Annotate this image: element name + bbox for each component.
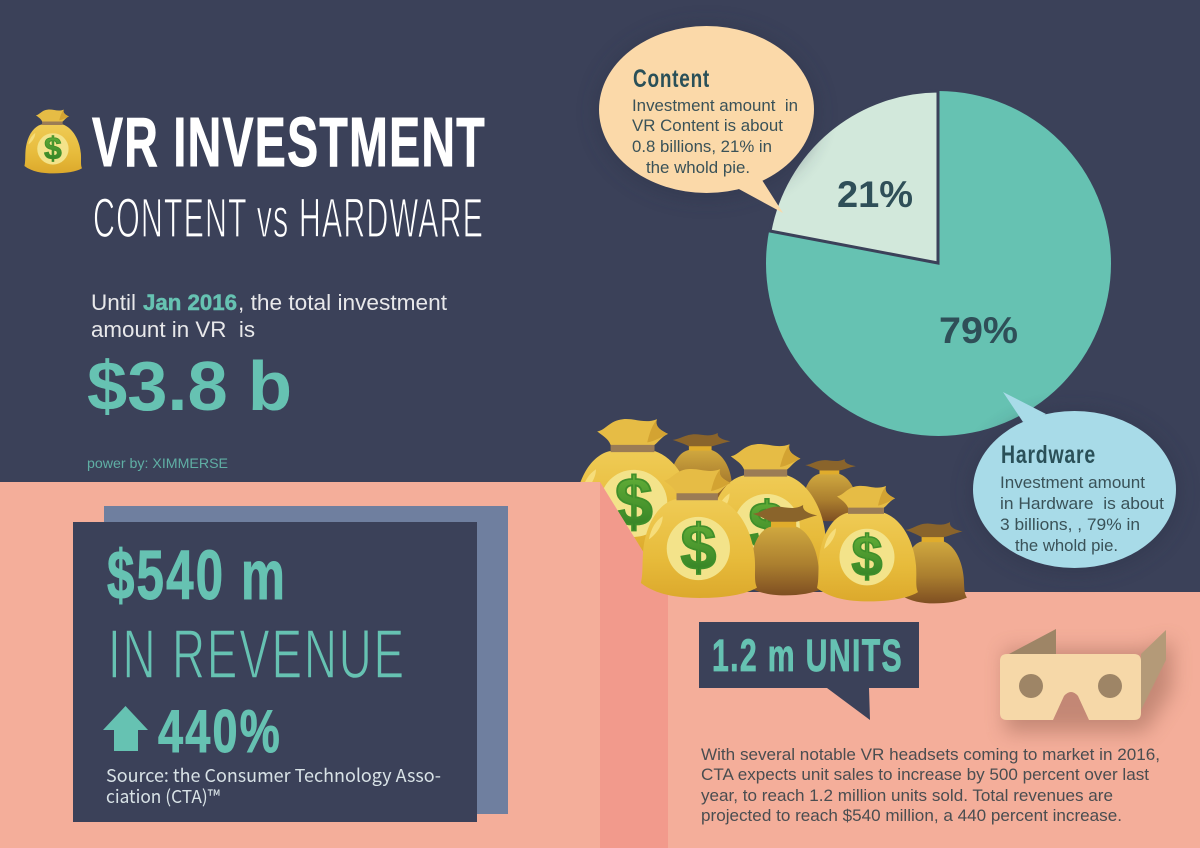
callout: content: VR Content is about bbox=[632, 116, 783, 135]
growth percent: 440% bbox=[158, 698, 282, 765]
revenue amount: $540 m bbox=[107, 536, 287, 614]
text block: forecast: CTA expects unit sales to increase by 500 percent over last bbox=[701, 765, 1149, 784]
panel: revenue bbox=[73, 506, 508, 822]
money bags pile: $ bbox=[748, 489, 785, 564]
money bags pile: $ bbox=[851, 525, 883, 589]
text block: forecast: With several notable VR headsets coming to market in 2016, bbox=[701, 745, 1160, 764]
callout: hardware: in Hardware is about bbox=[1000, 494, 1164, 513]
callout: content: 0.8 billions, 21% in bbox=[632, 137, 772, 156]
title: VR INVESTMENT bbox=[92, 103, 486, 181]
label: 79%: 79% bbox=[939, 310, 1018, 351]
callout: hardware bbox=[971, 392, 1179, 573]
icon: VR headset bbox=[1000, 629, 1172, 732]
callout: content: Investment amount in bbox=[632, 96, 798, 115]
pie chart bbox=[766, 91, 1111, 436]
icon: title money bag: $ bbox=[44, 130, 62, 166]
total investment text: Jan 2016 bbox=[143, 290, 237, 315]
total investment text: amount in VR is bbox=[91, 317, 255, 342]
money bags pile bbox=[641, 444, 967, 603]
total investment text: Until bbox=[91, 290, 136, 315]
callout: content: Content bbox=[633, 65, 710, 93]
total investment text: , the total investment bbox=[238, 290, 448, 315]
text block: forecast bbox=[701, 745, 1160, 825]
callout: content: the whold pie. bbox=[646, 158, 750, 177]
money bags pile: $ bbox=[680, 511, 716, 583]
text block: forecast: projected to reach $540 million, a 440 percent increase. bbox=[701, 806, 1122, 825]
source: Source: the Consumer Technology Asso- bbox=[106, 762, 441, 788]
source bbox=[106, 762, 441, 809]
callout: units: 1.2 m UNITS bbox=[712, 630, 903, 681]
source: ciation (CTA)™ bbox=[106, 783, 220, 809]
callout: content bbox=[597, 26, 817, 213]
total investment text bbox=[91, 290, 448, 342]
callout: hardware: 3 billions, , 79% in bbox=[1000, 515, 1140, 534]
total amount: $3.8 b bbox=[87, 347, 292, 425]
label: 21%: 21% bbox=[837, 174, 913, 215]
salmon background panels bbox=[0, 482, 1200, 848]
callout: hardware: Investment amount bbox=[1000, 473, 1145, 492]
money bags behind the fold: $ bbox=[615, 464, 653, 540]
callout: hardware: Hardware bbox=[1001, 441, 1096, 469]
icon: title money bag bbox=[24, 109, 82, 173]
icon: up arrow bbox=[103, 706, 148, 751]
money bags behind the fold bbox=[573, 419, 735, 556]
credit: power by: XIMMERSE bbox=[87, 455, 228, 471]
subtitle: CONTENT vs HARDWARE bbox=[93, 186, 484, 249]
revenue label: IN REVENUE bbox=[108, 615, 406, 693]
text block: forecast: year, to reach 1.2 million units sold. Total revenues are bbox=[701, 786, 1113, 805]
callout: units bbox=[699, 622, 919, 720]
callout: hardware: the whold pie. bbox=[1015, 536, 1118, 555]
